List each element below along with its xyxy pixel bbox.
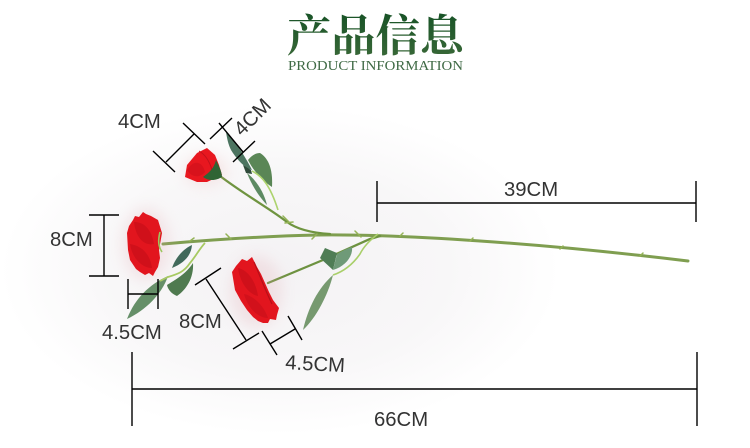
dimension: bud width 4CM	[118, 111, 205, 172]
dimension: lower flower 8CM	[179, 268, 259, 349]
upper leaves	[226, 132, 278, 210]
thorns	[190, 216, 643, 256]
left leaves	[127, 243, 205, 319]
sepals	[203, 160, 222, 180]
rose bud	[185, 148, 222, 182]
dimension: bud depth 4CM	[210, 95, 276, 162]
leaf: lower pale	[333, 247, 352, 270]
main stem	[163, 235, 688, 261]
dimension: bud depth 4CM: 4CM	[230, 95, 276, 141]
leaf: small	[172, 245, 192, 268]
dimension: lower flower 4.5CM	[262, 316, 346, 377]
dimension: 66CM: 66CM	[374, 409, 428, 431]
leaf: upper narrow	[226, 132, 252, 170]
dimension: 39CM	[377, 179, 696, 222]
dimension: left flower 4.5CM	[102, 279, 162, 344]
sepal: upper	[243, 165, 252, 174]
dimension: 66CM	[132, 352, 697, 431]
flower stems	[163, 176, 688, 283]
dimension: left flower 8CM	[50, 215, 119, 276]
dimension: left flower 4.5CM: 4.5CM	[102, 322, 162, 344]
dimension: bud width 4CM: 4CM	[118, 111, 161, 133]
lower branch	[268, 236, 380, 283]
rose left	[127, 212, 162, 276]
leaf: broad	[167, 263, 193, 296]
dimension: lower flower 8CM: 8CM	[179, 311, 222, 333]
title: 产品信息	[287, 0, 467, 64]
leaf: long lance	[127, 276, 168, 319]
lower leaves	[303, 234, 378, 330]
dimension: 39CM: 39CM	[504, 179, 558, 201]
dimension: lower flower 4.5CM: 4.5CM	[285, 352, 346, 377]
subtitle: PRODUCT INFORMATION	[288, 58, 464, 73]
leaf: upper right	[248, 153, 272, 187]
leaf: upper lower	[247, 173, 267, 205]
leaf: lower square	[320, 248, 337, 270]
rose lower	[232, 257, 279, 323]
flower shadows	[122, 154, 282, 328]
dimension: left flower 8CM: 8CM	[50, 229, 93, 251]
upper branch	[220, 176, 330, 234]
leaf: lower long	[303, 275, 333, 330]
